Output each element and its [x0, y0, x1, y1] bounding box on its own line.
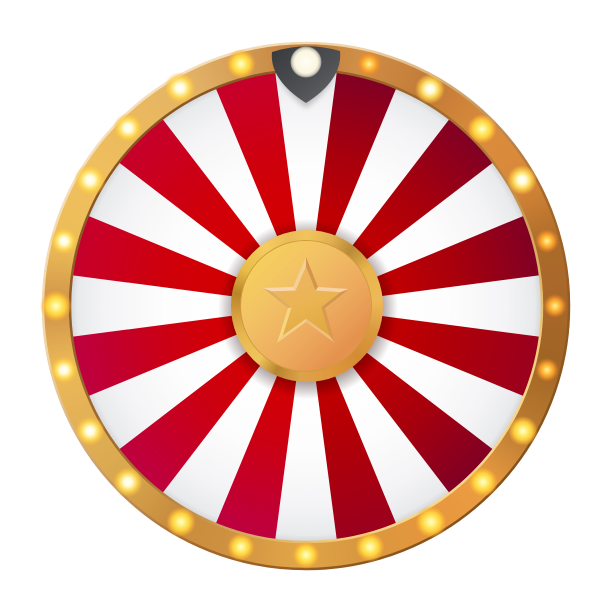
red segment 345deg — [215, 70, 336, 314]
light 9 — [507, 165, 537, 195]
red segment 15deg — [276, 70, 397, 314]
star bevel and plateau — [263, 257, 349, 343]
light 2 — [355, 532, 385, 562]
wheel face — [70, 70, 542, 542]
red segment 285deg — [70, 215, 314, 336]
red segment 195deg — [215, 298, 336, 542]
red segment 45deg — [284, 117, 495, 328]
red segments — [70, 70, 542, 542]
light 13 — [226, 49, 256, 79]
red segment 225deg — [117, 284, 328, 495]
light 15 — [113, 113, 143, 143]
red segment 255deg — [70, 276, 314, 397]
ring lights — [40, 49, 567, 569]
light 22 — [166, 507, 196, 537]
light 16 — [74, 164, 106, 196]
light 5 — [508, 416, 538, 446]
light 21 — [113, 467, 143, 497]
hub shadow — [218, 219, 398, 399]
light 4 — [468, 467, 498, 497]
red segment 75deg — [298, 215, 542, 336]
white background segments — [70, 70, 542, 542]
pin shadow — [276, 62, 336, 108]
light 12 — [356, 51, 382, 77]
hub rim — [230, 230, 382, 382]
light 14 — [164, 72, 196, 104]
light 3 — [415, 506, 447, 538]
hub face — [241, 241, 371, 371]
red segment 165deg — [276, 298, 397, 542]
light 18 — [40, 290, 72, 322]
pin shield — [272, 46, 340, 103]
light 8 — [535, 229, 559, 253]
light 7 — [543, 294, 567, 318]
pin gem — [290, 46, 322, 78]
ring inner bevel — [70, 70, 542, 542]
light 6 — [535, 358, 559, 382]
light 23 — [227, 533, 255, 561]
pointer pin — [272, 46, 340, 108]
red segment 135deg — [284, 284, 495, 495]
red segment 105deg — [298, 276, 542, 397]
red segment 315deg — [117, 117, 328, 328]
gold outer ring — [42, 42, 570, 570]
light 11 — [415, 74, 445, 104]
ring outer highlight edge — [43, 43, 569, 569]
light 1 — [292, 541, 320, 569]
light 19 — [50, 356, 78, 384]
light 10 — [467, 114, 497, 144]
light 20 — [75, 416, 105, 446]
light 17 — [50, 227, 78, 255]
